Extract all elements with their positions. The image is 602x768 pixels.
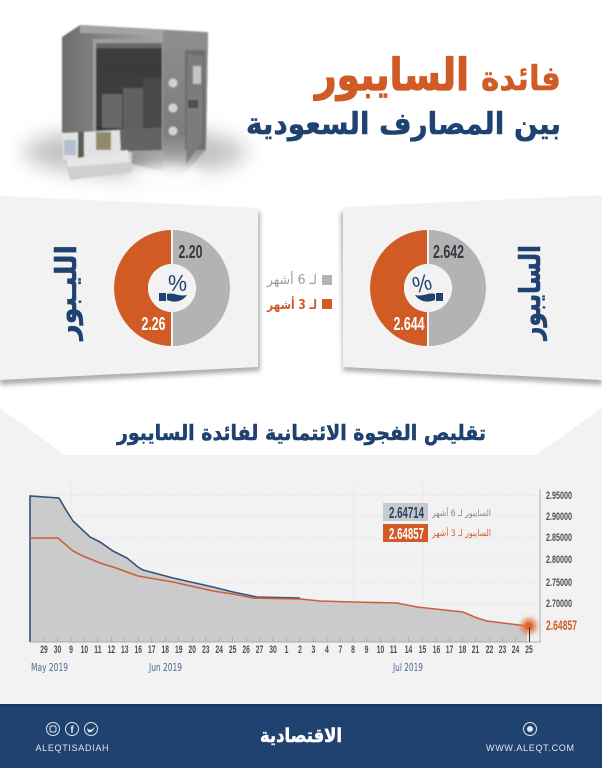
x axis labels: days: 30 (54, 644, 61, 656)
x axis labels: days: 7 (338, 644, 342, 656)
x axis labels: days: 11 (94, 644, 102, 656)
donut chart: SAIBOR: 2.642 (433, 242, 464, 262)
value box: 3 months: 2.64857 (389, 526, 424, 543)
x axis labels: days: 12 (108, 644, 115, 656)
x axis labels: days (40, 644, 533, 656)
banknotes (62, 130, 132, 180)
line chart: SAIBOR 3 and 6 months (30, 482, 577, 674)
illustration: bank vault with banknotes (23, 25, 247, 191)
x axis labels: days: 20 (188, 644, 196, 656)
area and lines (30, 496, 527, 642)
legend item: 3 months: لـ 3 أشهر (266, 296, 317, 313)
y axis labels: 2.90000 (546, 511, 572, 523)
title line: navy: بين المصارف السعودية (246, 107, 561, 142)
value box: 6 months (383, 503, 491, 522)
icon: website (524, 722, 536, 736)
legend item: 6 months: لـ 6 أشهر (266, 271, 317, 288)
social icons (46, 722, 98, 736)
x axis labels: days: 30 (269, 644, 277, 656)
donut chart: LIBOR: 2.20 (178, 242, 202, 262)
value box: 6 months: السايبور لـ 6 أشهر (431, 507, 491, 519)
value box: 6 months: 2.64714 (389, 505, 424, 522)
social icons: f (70, 725, 74, 736)
x axis labels: days: 19 (175, 644, 182, 656)
x axis labels: days: 10 (377, 644, 384, 656)
x axis labels: days: 21 (472, 644, 479, 656)
x axis labels: days: 18 (162, 644, 169, 656)
x axis labels: days: 25 (229, 644, 236, 656)
x axis labels: days: 14 (405, 644, 413, 656)
y axis labels: 2.95000 (546, 490, 572, 502)
panel: LIBOR (0, 196, 260, 385)
panel heading: SAIBOR: السايبور (513, 245, 547, 342)
value box: 3 months: السايبور لـ 3 أشهر (431, 527, 491, 539)
title line: orange: فائدة (481, 59, 561, 99)
x axis labels: days: 23 (202, 644, 209, 656)
x axis labels: days: 17 (446, 644, 453, 656)
x axis labels: days: 2 (298, 644, 302, 656)
donut chart: SAIBOR: 2.644 (394, 314, 424, 334)
x axis labels: days: 22 (486, 644, 493, 656)
panel heading: LIBOR: الليـبور (49, 245, 83, 342)
icon: percent over hand: % (409, 268, 434, 298)
panel: SAIBOR (341, 195, 602, 385)
x axis labels: days: 4 (325, 644, 329, 656)
x axis labels: days: 26 (242, 644, 250, 656)
donut chart: SAIBOR (370, 230, 486, 346)
x axis labels: days: 8 (351, 644, 355, 656)
logo: الاقتصادية (260, 725, 342, 747)
social handle: ALEQTISADIAH (36, 743, 108, 753)
x axis labels: days: 3 (312, 644, 315, 656)
chart heading: تقليص الفجوة الائتمانية لفائدة السايبور (116, 421, 486, 445)
x axis labels: days: 13 (121, 644, 129, 656)
y axis labels: 2.70000 (546, 598, 572, 610)
current value label: 2.64857 (546, 617, 577, 633)
x axis labels: days: 11 (390, 644, 397, 656)
x axis labels: days: 1 (285, 644, 288, 656)
marker: latest value (521, 618, 537, 642)
axes (30, 489, 540, 642)
x axis labels: days: 24 (512, 644, 520, 656)
footer (0, 704, 602, 768)
x axis labels: days: 27 (256, 644, 263, 656)
title (246, 50, 561, 142)
x axis labels: days: 16 (433, 644, 440, 656)
y axis labels: 2.75000 (546, 577, 572, 589)
x axis labels: days: 10 (81, 644, 88, 656)
x axis labels: months (31, 661, 423, 674)
y axis labels: 2.85000 (546, 532, 572, 544)
x axis labels: days: 16 (135, 644, 142, 656)
title line: orange: السايبور (313, 50, 469, 101)
x axis labels: days: 29 (40, 644, 48, 656)
x axis labels: months: Jun 2019 (148, 661, 182, 674)
x axis labels: days: 9 (69, 644, 73, 656)
website address: WWW.ALEQT.COM (486, 743, 574, 753)
x axis labels: days: 18 (459, 644, 466, 656)
x axis labels: months: Jul 2019 (392, 661, 423, 674)
donut chart: LIBOR (114, 230, 230, 346)
x axis labels: days: 25 (525, 644, 533, 656)
legend (266, 271, 332, 313)
x axis labels: days: 23 (499, 644, 506, 656)
icon: percent over hand: % (168, 270, 187, 296)
x axis labels: days: 15 (419, 644, 426, 656)
x axis labels: days: 9 (365, 644, 368, 656)
chart section background (0, 408, 602, 704)
value box: 3 months (383, 524, 491, 543)
x axis labels: days: 24 (215, 644, 223, 656)
x axis labels: days: 17 (148, 644, 156, 656)
donut chart: LIBOR: 2.26 (142, 314, 166, 334)
y axis labels: 2.80000 (546, 554, 572, 566)
x axis labels: months: May 2019 (31, 661, 68, 674)
y axis labels (546, 490, 572, 610)
